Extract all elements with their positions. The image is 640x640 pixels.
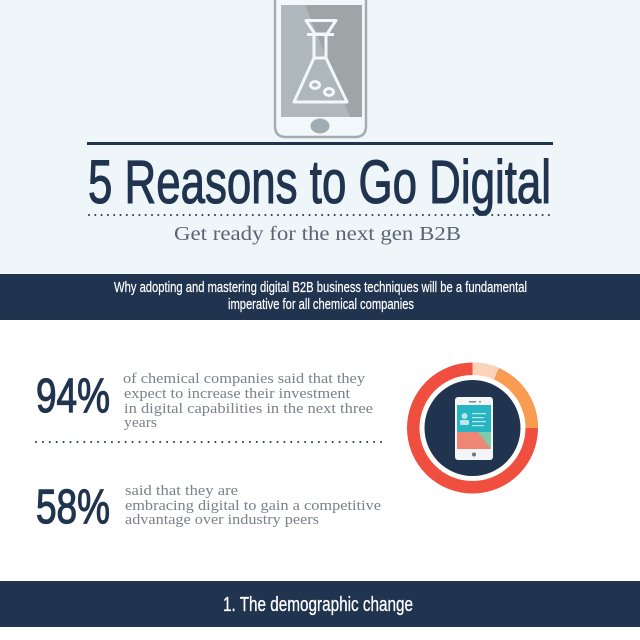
stat: 94%: years	[124, 415, 157, 431]
stats dotted divider	[36, 441, 383, 443]
section banner: the demographic change: 1. The demographic change	[223, 594, 413, 616]
intro banner: Why adopting and mastering digital B2B business techniques will be a fundamental	[114, 280, 527, 296]
top rule	[87, 142, 553, 145]
icon: small phone	[455, 397, 493, 460]
stat: 94%: in digital capabilities in the next three	[124, 401, 373, 417]
stat: 94%: of chemical companies said that they	[123, 371, 366, 387]
stat: 58%: said that they are	[125, 483, 238, 499]
section banner: the demographic change	[0, 581, 640, 627]
intro banner	[0, 274, 640, 320]
title dotted divider	[89, 214, 549, 216]
stat: 58%	[36, 481, 381, 534]
stat: 94%: 94%	[36, 370, 110, 423]
stat: 94%: expect to increase their investment	[124, 386, 350, 402]
header background	[0, 0, 640, 274]
donut chart with phone icon	[407, 362, 538, 494]
subtitle: Get ready for the next gen B2B	[174, 223, 461, 245]
stat: 94%	[36, 370, 373, 431]
stat: 58%: embracing digital to gain a competitive	[125, 498, 381, 514]
stat: 58%: advantage over industry peers	[125, 512, 319, 528]
intro banner: imperative for all chemical companies	[228, 297, 414, 313]
icon: phone with flask	[275, 0, 366, 137]
stat: 58%: 58%	[36, 481, 110, 534]
